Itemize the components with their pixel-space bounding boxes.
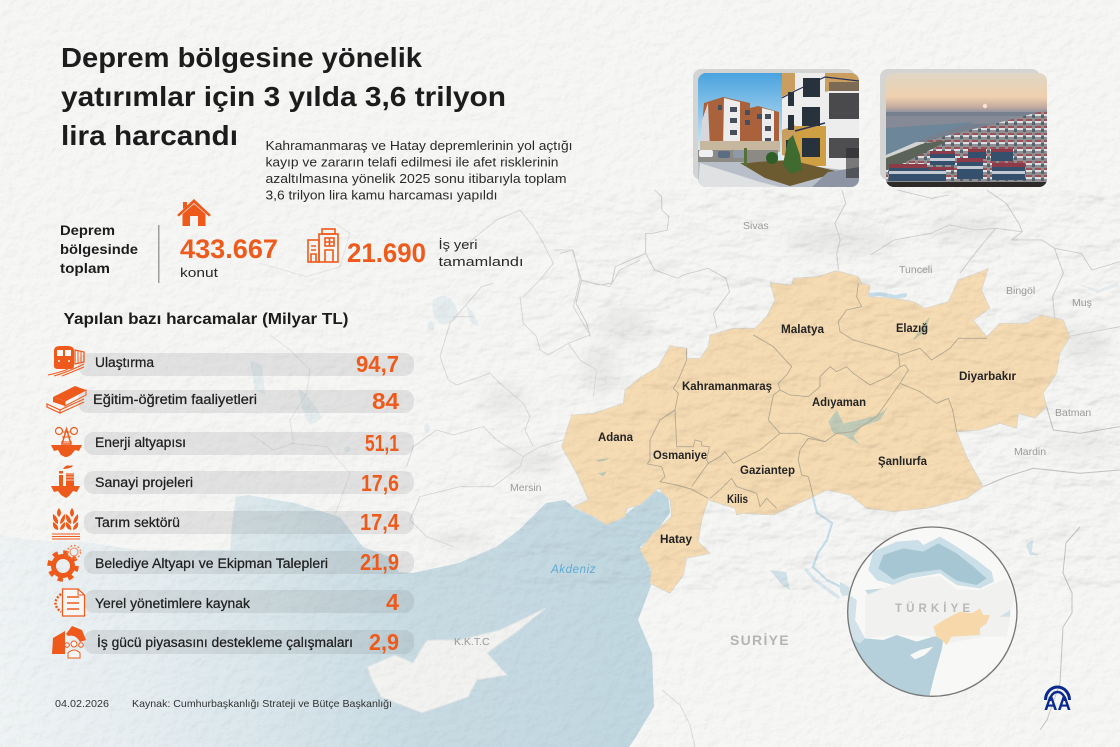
- divider: [158, 225, 160, 283]
- row: Sanayi: Sanayi projeleri: [95, 475, 193, 490]
- icon: document: [56, 589, 84, 616]
- map: lakes and rivers: [250, 282, 1118, 452]
- province labels: Elazığ: [896, 323, 928, 335]
- icon: energy: [51, 428, 82, 457]
- stat: workplaces: [347, 237, 524, 269]
- row: Enerji: 51,1: [365, 430, 399, 456]
- row: Ulaştırma: [78, 351, 414, 377]
- stat heading: [60, 222, 138, 276]
- source: Kaynak: Cumhurbaşkanlığı Strateji ve Bütçe Başkanlığı: [132, 698, 392, 710]
- icon: office buildings: [308, 229, 338, 262]
- stat: housing: [180, 234, 278, 280]
- neighbouring place labels: Mardin: [1014, 446, 1046, 458]
- section heading: Yapılan bazı harcamalar (Milyar TL): [64, 311, 348, 328]
- map: Keban lake and Euphrates: [806, 294, 905, 600]
- row: Yerel: 4: [386, 589, 399, 615]
- map: sea: [0, 490, 670, 747]
- stat heading: bölgesinde: [60, 241, 138, 257]
- icon: wheat: [52, 508, 80, 539]
- province labels: Adıyaman: [812, 397, 866, 409]
- province labels: Osmaniye: [653, 450, 707, 462]
- stat: housing: 433.667: [180, 234, 278, 264]
- row: Belediye: 21,9: [360, 549, 399, 575]
- row: Yerel: [84, 589, 414, 615]
- icon: workers: [52, 626, 86, 658]
- neighbouring place labels: [454, 220, 1092, 648]
- inset label: TÜRKİYE: [895, 602, 970, 615]
- title: Deprem bölgesine yönelik: [61, 42, 423, 73]
- province labels: Şanlıurfa: [878, 456, 928, 468]
- neighbouring place labels: K.K.T.C: [454, 636, 490, 648]
- row: Ulaştırma: 94,7: [356, 351, 399, 377]
- stat heading: toplam: [60, 260, 110, 276]
- row: Eğitim-öğretim: 84: [372, 388, 399, 414]
- row: Eğitim-öğretim: Eğitim-öğretim faaliyetleri: [93, 392, 257, 407]
- row: İş gücü: İş gücü piyasasını destekleme çalışmaları: [97, 635, 353, 650]
- map: neighbouring province borders: [250, 190, 1120, 747]
- row: Yerel: Yerel yönetimlere kaynak: [95, 596, 250, 611]
- row: Belediye: Belediye Altyapı ve Ekipman Talepleri: [95, 556, 328, 571]
- province labels: Malatya: [781, 324, 825, 336]
- row: Enerji: Enerji altyapısı: [95, 435, 186, 450]
- row: İş gücü: 2,9: [369, 629, 399, 655]
- neighbouring place labels: Akdeniz: [550, 564, 596, 576]
- intro paragraph: Kahramanmaraş ve Hatay depremlerinin yol açtığı: [266, 138, 572, 153]
- title: lira harcandı: [61, 120, 238, 151]
- icon: gears: [50, 546, 80, 580]
- map: highlighted earthquake region: [562, 268, 1070, 593]
- map: Cyprus: [367, 608, 546, 713]
- neighbouring place labels: Batman: [1055, 407, 1091, 419]
- intro paragraph: 3,6 trilyon lira kamu harcaması yapıldı: [266, 188, 498, 202]
- icon: books: [47, 386, 86, 413]
- icon: train: [48, 346, 84, 376]
- date: 04.02.2026: [55, 698, 109, 710]
- neighbouring place labels: Sivas: [743, 220, 769, 232]
- province labels: Kilis: [727, 494, 748, 506]
- inset locator map: [840, 527, 1017, 700]
- intro paragraph: kayıp ve zararın telafi edilmesi ile afet risklerinin: [266, 154, 558, 170]
- map: terrain shading: [430, 216, 1120, 548]
- photo 1: apartment blocks: [693, 69, 860, 187]
- neighbouring place labels: Mersin: [510, 482, 542, 494]
- row: Sanayi: 17,6: [361, 470, 399, 496]
- neighbouring place labels: Bingöl: [1006, 285, 1035, 297]
- title: [61, 42, 506, 151]
- row: Enerji: [84, 430, 414, 456]
- neighbouring place labels: Muş: [1072, 297, 1092, 309]
- stat: housing: konut: [180, 265, 218, 280]
- province labels: Adana: [598, 432, 634, 444]
- row: Tarım: Tarım sektörü: [95, 515, 180, 530]
- stat: workplaces: tamamlandı: [438, 254, 524, 269]
- stat: workplaces: İş yeri: [438, 237, 478, 252]
- intro paragraph: azaltılmasına yönelik 2025 sonu itibarıyla toplam: [266, 171, 566, 186]
- row: Ulaştırma: Ulaştırma: [95, 355, 154, 370]
- province labels: Diyarbakır: [959, 371, 1017, 383]
- row: Belediye: [84, 549, 414, 575]
- logo: AA: AA: [1044, 694, 1071, 715]
- province labels: Gaziantep: [740, 465, 795, 477]
- row: Tarım: [84, 509, 414, 535]
- map: Aleppo-area lakes: [770, 540, 1040, 590]
- province labels: Kahramanmaraş: [682, 381, 772, 393]
- province labels: Hatay: [660, 534, 693, 546]
- stat heading: Deprem: [60, 222, 115, 238]
- row: Eğitim-öğretim: [78, 388, 414, 414]
- province labels: [598, 323, 1017, 546]
- row: Tarım: 17,4: [360, 509, 399, 535]
- photo 2: aerial city view at sunset: [880, 69, 1047, 187]
- neighbouring place labels: SURİYE: [730, 632, 790, 648]
- icon: factory: [51, 465, 80, 498]
- row: Sanayi: [84, 470, 414, 496]
- map: relief texture: [435, 190, 1120, 590]
- row: İş gücü: [84, 629, 414, 655]
- title: yatırımlar için 3 yılda 3,6 trilyon: [61, 81, 506, 112]
- intro paragraph: [266, 138, 572, 202]
- neighbouring place labels: Tunceli: [899, 264, 932, 276]
- stat: workplaces: 21.690: [347, 238, 426, 268]
- icon: house: [177, 199, 211, 226]
